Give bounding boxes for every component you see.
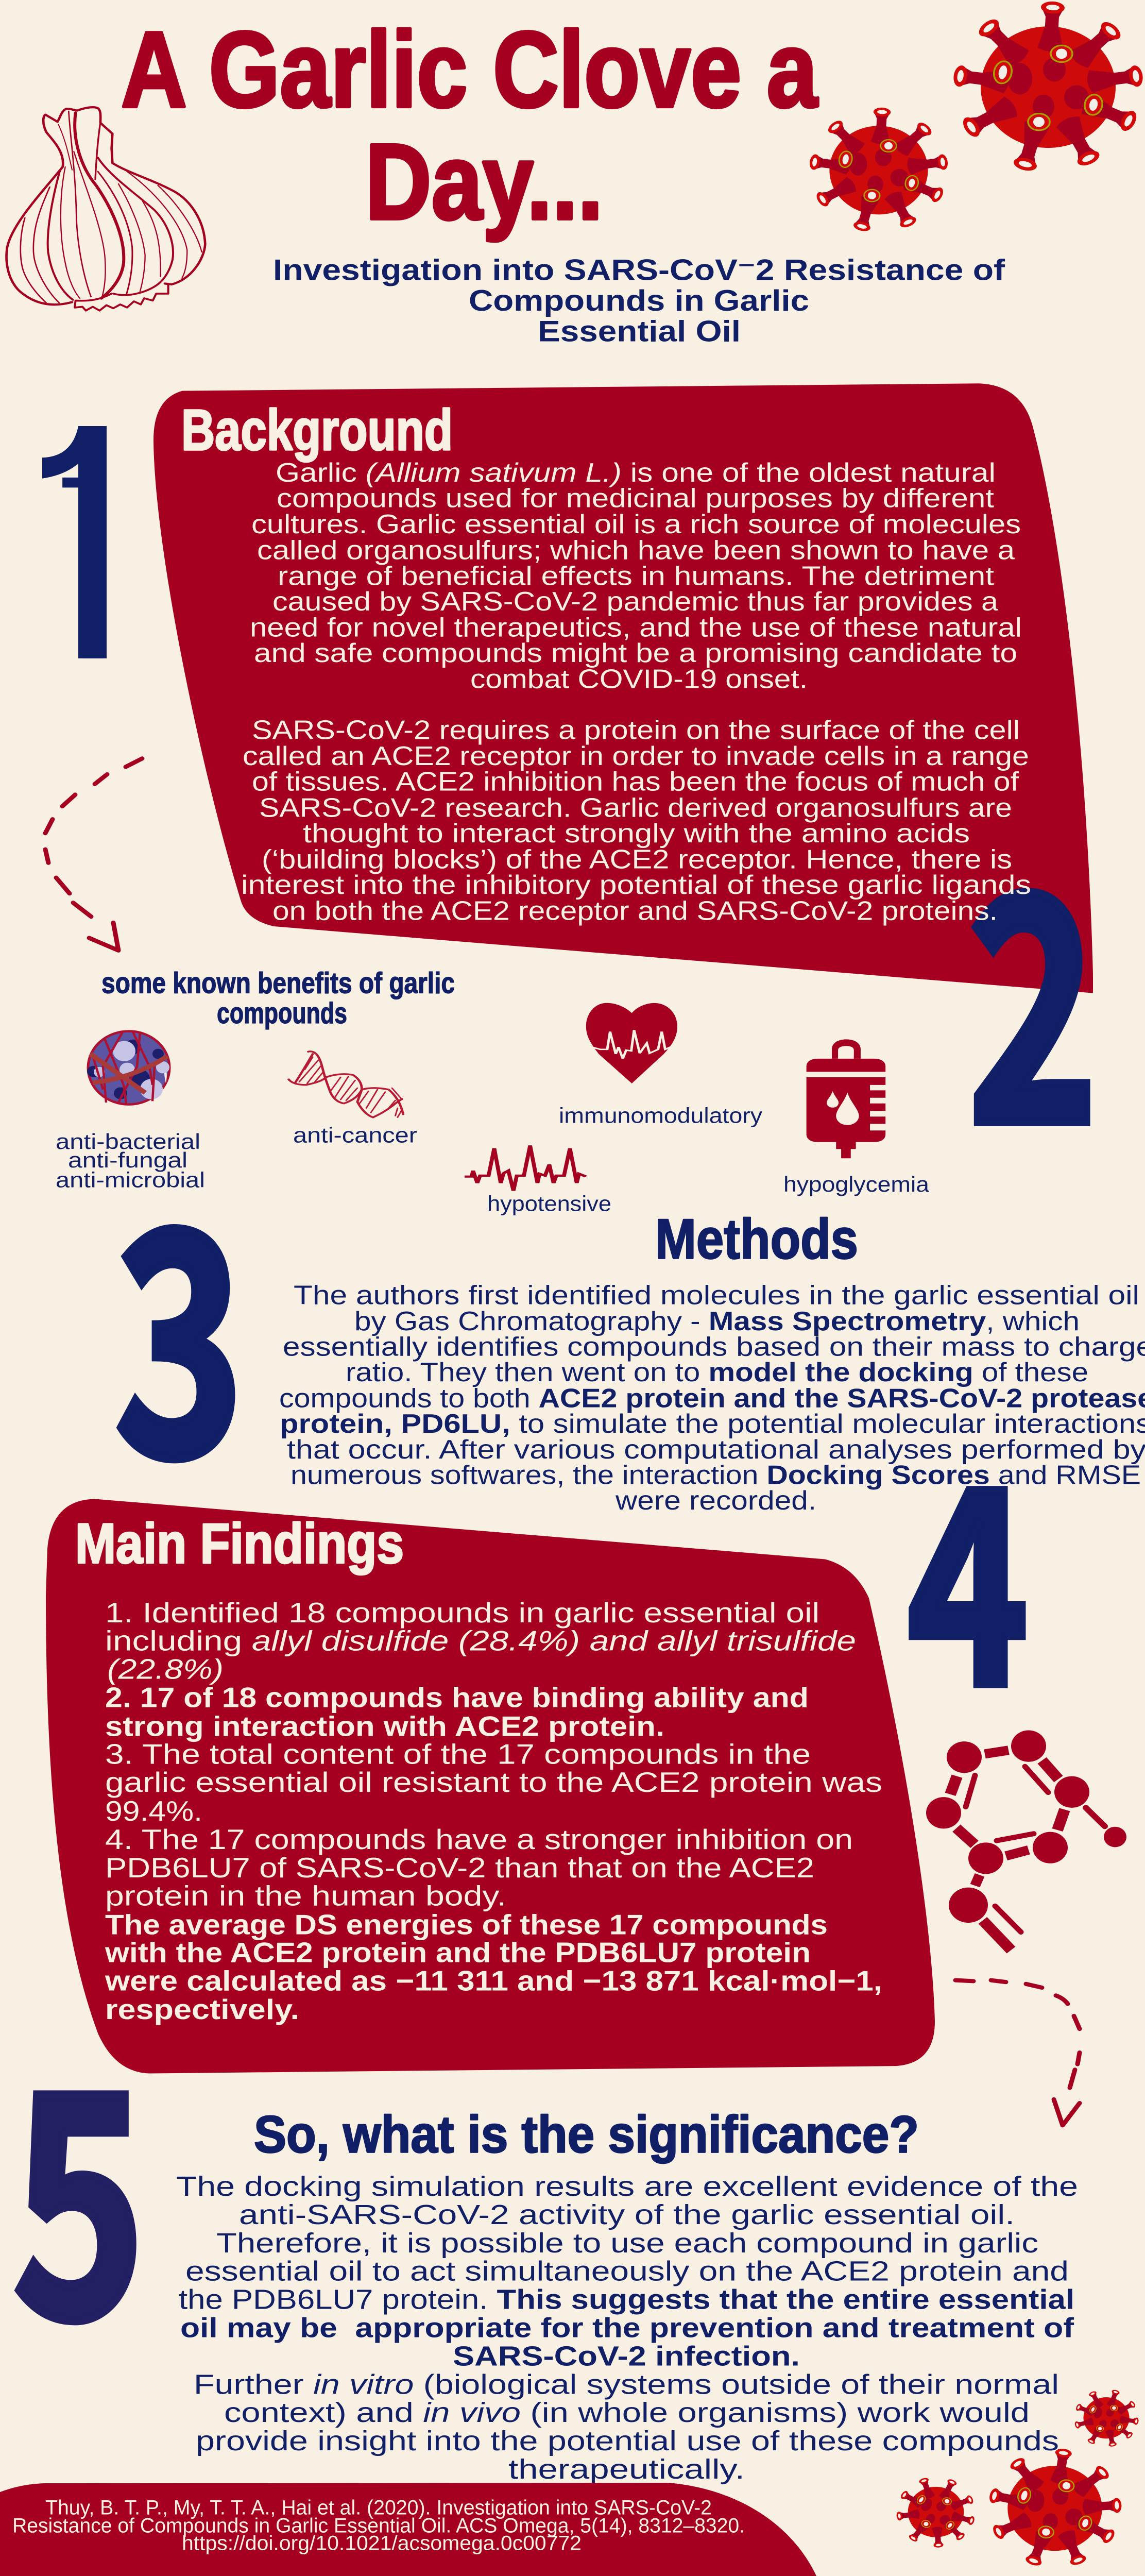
text block: main findings: strong interaction with ACE2 protein. (105, 1710, 664, 1742)
text block: main findings: 99.4%. (105, 1795, 202, 1827)
text block: background paragraph 1: called organosulfurs; which have been shown to have a (257, 535, 1015, 565)
number 5: 5 (12, 1960, 146, 2406)
benefit labels (56, 1104, 930, 1216)
icon: molecule (926, 1731, 1126, 1950)
benefit labels: hypoglycemia (783, 1173, 930, 1196)
title: Day... (365, 122, 603, 242)
text block: methods: compounds to both ACE2 protein and the SARS-CoV-2 protease (279, 1383, 1145, 1413)
number 1: 1 (47, 256, 132, 822)
text block: main findings: protein in the human body. (105, 1880, 506, 1912)
text block: methods: were recorded. (615, 1485, 816, 1516)
text block: main findings: 1. Identified 18 compounds in garlic essential oil (105, 1597, 819, 1629)
text block: background paragraph 1: Garlic (Allium sativum L.) is one of the oldest natural (276, 457, 996, 487)
text block: significance: therapeutically. (508, 2454, 745, 2485)
benefit labels: anti-cancer (293, 1124, 417, 1147)
text block: significance: provide insight into the potential use of these compounds (196, 2426, 1059, 2456)
text block: background paragraph 2 (241, 715, 1031, 926)
text block: background paragraph 1: compounds used for medicinal purposes by different (277, 483, 994, 513)
text block: significance: Therefore, it is possible to use each compound in garlic (216, 2228, 1038, 2259)
text block: significance: SARS-CoV-2 infection. (453, 2341, 800, 2372)
text block: background paragraph 1 (250, 457, 1022, 694)
icon: virus bottom middle (884, 2465, 988, 2559)
text block: significance (176, 2171, 1078, 2485)
subtitle: Essential Oil (538, 314, 741, 348)
text block: main findings (105, 1597, 882, 2025)
icon: dna helix (288, 1052, 403, 1117)
text block: main findings: respectively. (105, 1994, 299, 2025)
text block: background paragraph 1: need for novel therapeutics, and the use of these natural (250, 612, 1022, 642)
benefit labels: anti-bacterial (56, 1130, 200, 1154)
icon: pulse line (465, 1145, 586, 1191)
text block: significance: The docking simulation results are excellent evidence of the (176, 2171, 1078, 2202)
text block: main findings: (22.8%) (107, 1653, 224, 1685)
text block: citation (12, 2496, 745, 2554)
heading: main findings: Main Findings (75, 1512, 404, 1575)
text block: main findings: PDB6LU7 of SARS-CoV-2 than that on the ACE2 (105, 1852, 814, 1884)
text block: main findings: garlic essential oil resistant to the ACE2 protein was (105, 1767, 882, 1799)
panel: main findings (46, 1499, 935, 2073)
text block: methods: essentially identifies compounds based on their mass to charge (283, 1331, 1145, 1362)
text block: significance: the PDB6LU7 protein. This suggests that the entire essential (179, 2284, 1074, 2315)
text block: significance: essential oil to act simultaneously on the ACE2 protein and (185, 2256, 1069, 2287)
text block: significance: anti-SARS-CoV-2 activity of the garlic essential oil. (239, 2199, 1015, 2230)
panel: background (153, 383, 1093, 993)
icon: virus bottom right small (1066, 2382, 1145, 2454)
text block: background paragraph 2: SARS-CoV-2 research. Garlic derived organosulfurs are (259, 792, 1012, 823)
arrow: findings to significance (955, 1980, 1080, 2125)
benefit labels: anti-fungal (68, 1148, 187, 1172)
benefit labels: immunomodulatory (559, 1104, 762, 1128)
title: A Garlic Clove a (121, 9, 818, 129)
heading: significance: So, what is the significance? (254, 2106, 919, 2163)
icon: iv blood bag (807, 1039, 885, 1158)
text block: significance: oil may be appropriate for the prevention and treatment of (180, 2312, 1074, 2344)
number 1 (42, 426, 107, 658)
text block: background paragraph 2: of tissues. ACE2 inhibition has been the focus of much of (252, 766, 1019, 796)
text block: methods: The authors first identified molecules in the garlic essential oil (294, 1280, 1139, 1310)
text block: methods: protein, PD6LU, to simulate the potential molecular interactions (280, 1408, 1145, 1438)
icon: bacteria (87, 1031, 169, 1105)
text block: background paragraph 1: range of beneficial effects in humans. The detriment (278, 561, 994, 591)
subtitle: Compounds in Garlic (469, 284, 809, 317)
text block: background paragraph 2: called an ACE2 receptor in order to invade cells in a range (243, 741, 1029, 771)
text block: methods (279, 1280, 1145, 1516)
text block: methods: ratio. They then went on to model the docking of these (346, 1357, 1088, 1387)
text block: main findings: 4. The 17 compounds have a stronger inhibition on (105, 1824, 853, 1855)
benefit labels: anti-microbial (56, 1168, 205, 1192)
number 2: 2 (967, 759, 1099, 1212)
number 3: 3 (114, 1097, 245, 1544)
text block: methods: that occur. After various computational analyses performed by (287, 1434, 1145, 1465)
number 4: 4 (908, 1372, 1028, 1761)
heading: background: Background (181, 398, 453, 462)
text block: main findings: with the ACE2 protein and the PDB6LU7 protein (105, 1937, 811, 1969)
text block: main findings: including allyl disulfide (28.4%) and allyl trisulfide (105, 1625, 856, 1657)
text block: background paragraph 1: and safe compounds might be a promising candidate to (254, 638, 1017, 668)
heading: some known benefits: some known benefits of garlic (101, 967, 455, 999)
heading: some known benefits (101, 967, 455, 1029)
icon: small virus top (809, 107, 949, 233)
icon: virus bottom large (982, 2443, 1128, 2573)
text block: background paragraph 2: on both the ACE2 receptor and SARS-CoV-2 proteins. (272, 895, 998, 926)
text block: background paragraph 2: thought to interact strongly with the amino acids (303, 818, 970, 849)
text block: background paragraph 1: caused by SARS-CoV-2 pandemic thus far provides a (272, 586, 998, 617)
text block: main findings: The average DS energies of these 17 compounds (105, 1909, 828, 1941)
panel: citation (0, 2483, 816, 2576)
icon: heart with pulse (586, 1003, 677, 1083)
text block: citation: https://doi.org/10.1021/acsomega.0c00772 (182, 2532, 582, 2554)
text block: main findings: were calculated as −11 311 and −13 871 kcal·mol−1, (105, 1965, 882, 1997)
text block: citation: Resistance of Compounds in Garlic Essential Oil. ACS Omega, 5(14), 8312–8320. (12, 2514, 745, 2537)
subtitle: Investigation into SARS-CoV⁻2 Resistance of (273, 253, 1005, 286)
text block: methods: by Gas Chromatography - Mass Spectrometry, which (354, 1306, 1080, 1336)
text block: citation: Thuy, B. T. P., My, T. T. A., Hai et al. (2020). Investigation into SARS-CoV-2 (45, 2496, 712, 2519)
heading: methods: Methods (655, 1207, 858, 1270)
text block: significance: context) and in vivo (in whole organisms) work would (224, 2397, 1030, 2429)
text block: significance: Further in vitro (biological systems outside of their normal (194, 2369, 1059, 2400)
text block: methods: numerous softwares, the interaction Docking Scores and RMSE (290, 1460, 1141, 1490)
icon: garlic bulb (7, 107, 205, 311)
text block: background paragraph 2: SARS-CoV-2 requires a protein on the surface of the cell (252, 715, 1020, 745)
text block: background paragraph 2: (‘building blocks’) of the ACE2 receptor. Hence, there is (262, 844, 1012, 874)
subtitle (273, 253, 1005, 348)
title (121, 9, 818, 242)
icon: large virus top right (952, 1, 1144, 173)
text block: main findings: 2. 17 of 18 compounds have binding ability and (105, 1682, 809, 1714)
text block: background paragraph 1: cultures. Garlic essential oil is a rich source of molecules (251, 509, 1021, 539)
arrow: background to benefits (45, 758, 142, 951)
text block: background paragraph 1: combat COVID-19 onset. (470, 664, 808, 694)
text block: main findings: 3. The total content of the 17 compounds in the (105, 1738, 811, 1770)
benefit labels: hypotensive (487, 1192, 611, 1216)
text block: background paragraph 2: interest into the inhibitory potential of these garlic ligands (241, 870, 1031, 900)
heading: some known benefits: compounds (217, 996, 347, 1029)
